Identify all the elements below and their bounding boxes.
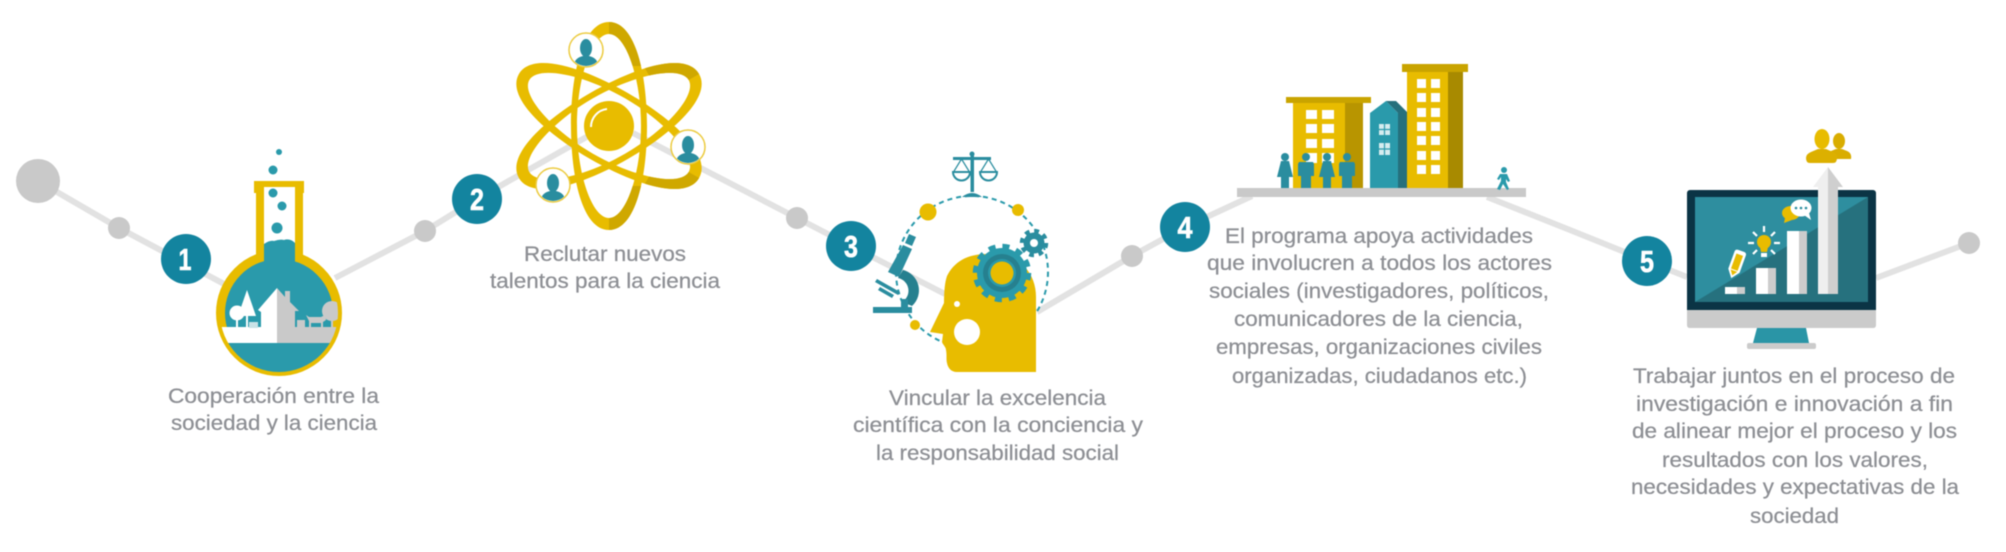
group of people <box>1277 153 1355 188</box>
text: step 1: Cooperación entre la <box>168 385 379 408</box>
icon: users <box>1806 129 1851 163</box>
badge 3: 3 <box>844 229 858 264</box>
tower <box>1402 64 1468 188</box>
building left <box>1286 97 1371 188</box>
text: step 4 <box>1207 225 1552 388</box>
connecting timeline path <box>38 133 1969 312</box>
text: step 2 <box>490 243 720 293</box>
bar chart <box>1725 167 1843 294</box>
text: step 5: investigación e innovación a fin <box>1636 393 1953 416</box>
text: step 5: de alinear mejor el proceso y los <box>1632 420 1957 443</box>
text: step 1 <box>168 385 379 435</box>
big gear <box>976 246 1028 300</box>
icon: flask with community scene <box>215 149 347 375</box>
badge 3 <box>826 221 876 271</box>
icon: pencil <box>1726 249 1747 280</box>
text: step 1: sociedad y la ciencia <box>171 412 377 435</box>
badge 4: 4 <box>1178 210 1193 245</box>
text: step 5: necesidades y expectativas de la <box>1631 476 1959 499</box>
icon: atom with people <box>516 21 706 231</box>
person token left <box>536 168 570 202</box>
text: step 4: empresas, organizaciones civiles <box>1216 336 1542 359</box>
person token right <box>671 130 705 164</box>
badge 5: 5 <box>1640 244 1654 279</box>
head silhouette <box>930 254 1036 372</box>
text: step 3: Vincular la excelencia <box>889 387 1106 410</box>
text: step 4: sociales (investigadores, políticos, <box>1209 280 1549 303</box>
badge 2: 2 <box>470 182 484 217</box>
icon: head with gears, scale and microscope <box>873 152 1048 372</box>
icon: light bulb <box>1748 226 1780 257</box>
icon: speech bubbles <box>1782 200 1812 223</box>
text: step 4: comunicadores de la ciencia, <box>1234 308 1523 331</box>
text: step 5 <box>1631 365 1959 528</box>
badge 5 <box>1622 236 1672 286</box>
badge 2 <box>452 174 502 224</box>
badge 1 <box>161 234 211 284</box>
text: step 4: El programa apoya actividades <box>1225 225 1533 248</box>
text: step 3: científica con la conciencia y <box>853 414 1144 437</box>
platform <box>1237 188 1526 197</box>
timeline nodes <box>16 159 1980 267</box>
walking person <box>1497 167 1510 190</box>
teal house <box>1370 101 1407 188</box>
text: step 3 <box>853 387 1144 465</box>
text: step 3: la responsabilidad social <box>876 442 1119 465</box>
text: step 5: resultados con los valores, <box>1662 449 1928 472</box>
text: step 4: organizadas, ciudadanos etc.) <box>1232 365 1527 388</box>
text: step 4: que involucren a todos los actores <box>1207 252 1552 275</box>
small gear <box>1022 231 1046 255</box>
person token top <box>569 33 603 67</box>
microscope <box>873 234 919 313</box>
text: step 2: Reclutar nuevos <box>524 243 686 266</box>
text: step 5: Trabajar juntos en el proceso de <box>1633 365 1955 388</box>
badge 1: 1 <box>178 242 192 277</box>
icon: monitor with rising chart <box>1687 129 1876 349</box>
scale <box>953 152 997 197</box>
badge 4 <box>1160 202 1210 252</box>
text: step 2: talentos para la ciencia <box>490 270 720 293</box>
text: step 5: sociedad <box>1750 505 1839 528</box>
icon: city buildings with people <box>1237 64 1526 197</box>
